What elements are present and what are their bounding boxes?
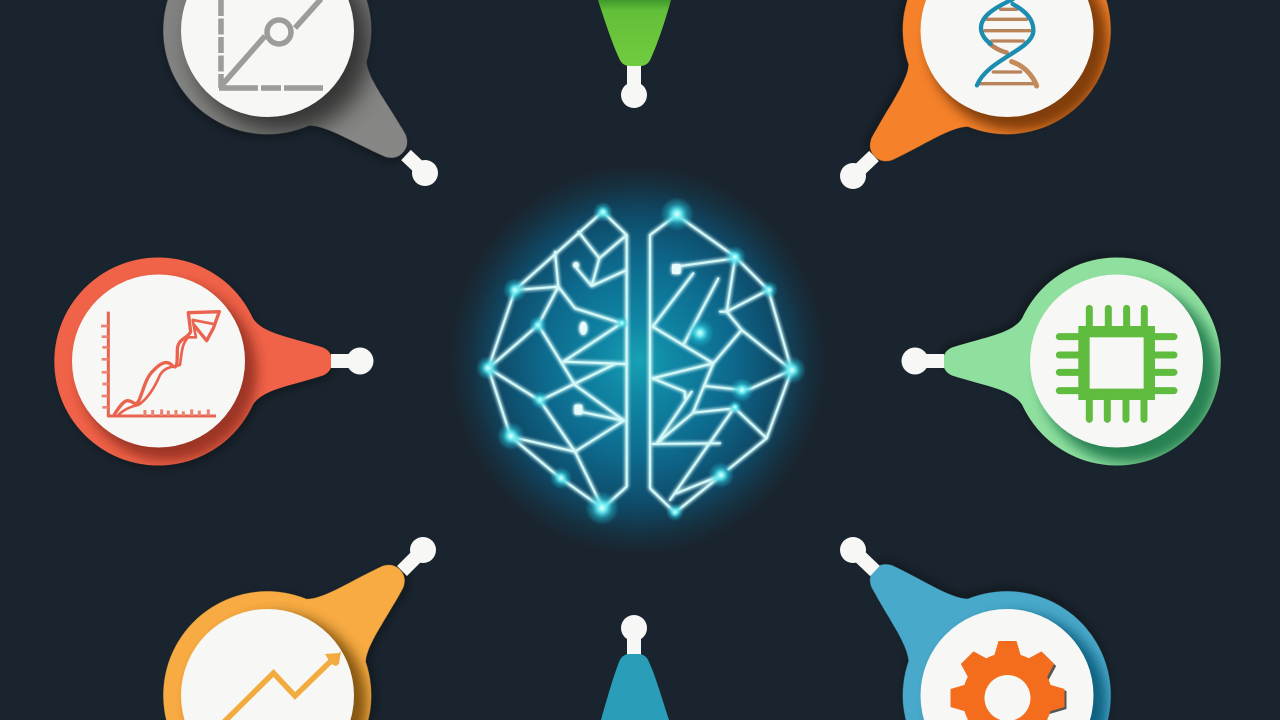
white disc (181, 0, 354, 117)
icon: microchip (1059, 308, 1174, 419)
shadow (1040, 285, 1218, 463)
right hemisphere network (650, 215, 792, 513)
pin: blue gear (lower right) (840, 537, 1111, 720)
icon: gear (950, 641, 1066, 720)
brain glow halo (450, 165, 826, 555)
shadow (192, 0, 372, 134)
connector dot (621, 60, 647, 108)
connector dot (902, 348, 944, 374)
white disc (920, 609, 1094, 720)
pin: orange DNA (upper right) (840, 0, 1111, 189)
white disc (1030, 274, 1203, 448)
white disc (920, 0, 1094, 117)
glowing nodes (476, 197, 806, 525)
connector dot (840, 156, 874, 189)
pin: gray scatter chart (upper left) (163, 0, 438, 186)
icon: trend arrow (224, 651, 341, 720)
pin body (943, 258, 1221, 466)
pin body (803, 0, 1154, 232)
shadow (189, 614, 367, 720)
pin body (120, 0, 473, 230)
pin body (54, 258, 332, 466)
pin: green (top centre) (598, 0, 671, 108)
pin body (803, 494, 1154, 720)
pin: red growth chart (left) (54, 258, 373, 466)
connector dot (621, 615, 647, 658)
connector dot (840, 537, 875, 571)
pin body (120, 494, 472, 720)
icon: line chart with circle (219, 0, 325, 88)
shadow (929, 614, 1107, 720)
pin: yellow trend arrow (lower left) (163, 537, 436, 720)
white disc (181, 609, 354, 720)
shadow (79, 283, 257, 461)
connector dot (402, 537, 436, 571)
pin: teal (bottom centre) (601, 615, 669, 720)
white disc (72, 274, 245, 448)
connector dot (406, 155, 438, 186)
pin tail (601, 654, 669, 720)
left hemisphere network (488, 212, 627, 508)
connector dot (331, 348, 374, 374)
pin: mint chip (right) (902, 258, 1221, 466)
icon: growth chart (101, 312, 219, 416)
pin tail (598, 0, 671, 66)
shadow (928, 0, 1108, 131)
icon: DNA helix (977, 0, 1037, 86)
central neural brain (476, 197, 806, 525)
